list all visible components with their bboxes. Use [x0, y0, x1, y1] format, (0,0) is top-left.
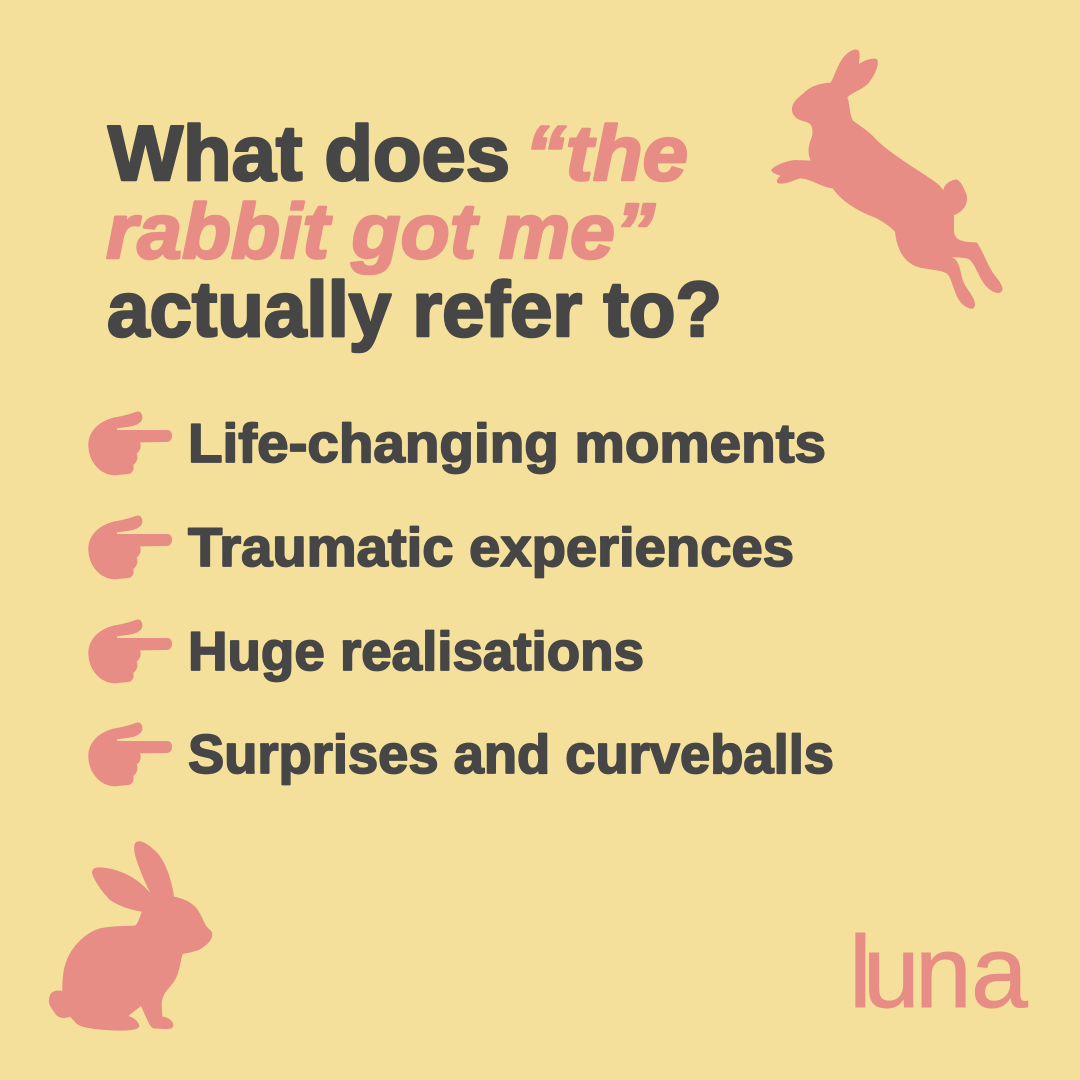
icon: pointing hand	[88, 411, 172, 475]
title: What does	[108, 109, 510, 197]
list item: Traumatic experiences: Traumatic experiences	[188, 516, 794, 578]
icon: sitting rabbit	[49, 841, 212, 1031]
title: actually refer to?	[107, 265, 722, 353]
title: rabbit got me”	[106, 187, 655, 275]
icon: pointing hand	[88, 515, 172, 579]
icon: pointing hand	[88, 722, 172, 786]
list item: Life-changing moments: Life-changing moments	[188, 412, 826, 474]
logo: luna: luna	[849, 915, 1028, 1029]
icon: pointing hand	[88, 619, 172, 683]
list item: Huge realisations: Huge realisations	[188, 620, 644, 682]
title: “the	[525, 109, 688, 197]
list item: Surprises and curveballs: Surprises and curveballs	[188, 723, 834, 785]
title	[106, 109, 722, 353]
icon: leaping rabbit	[771, 50, 1002, 309]
